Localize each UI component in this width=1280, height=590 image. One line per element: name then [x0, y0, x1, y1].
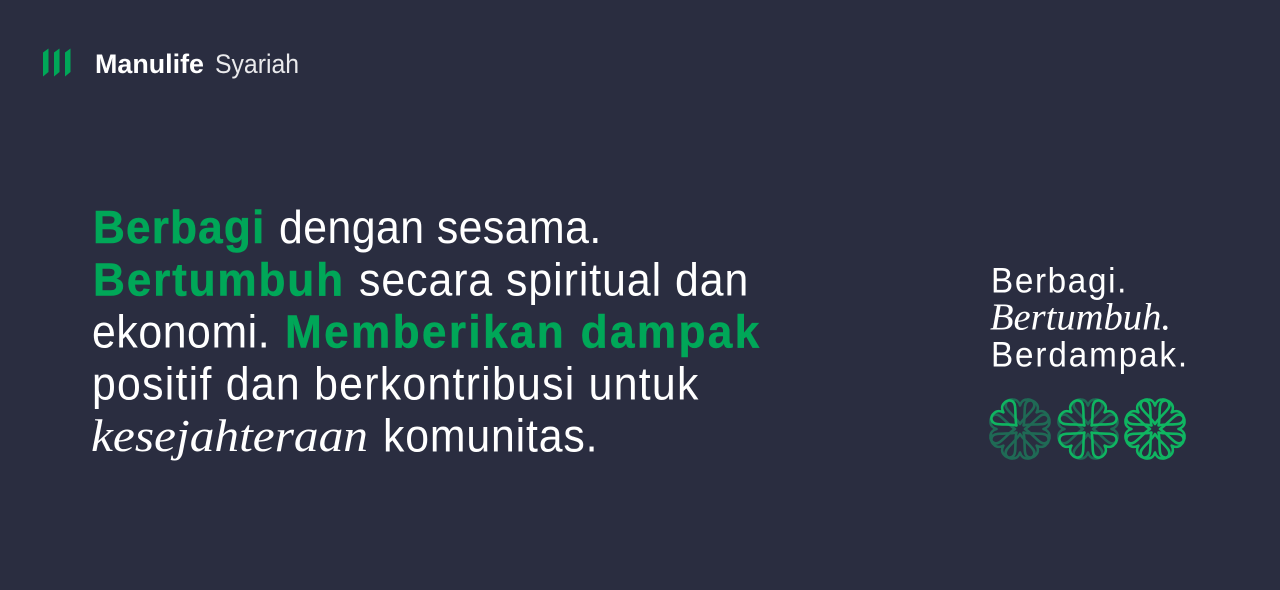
line 1: dengan sesama.: [279, 203, 601, 253]
line 2: [93, 254, 748, 306]
icons: three clover flowers: [989, 398, 1186, 460]
line 3: Memberikan dampak: [285, 306, 760, 358]
line 4: positif dan berkontribusi untuk: [92, 359, 699, 410]
line 2: Bertumbuh: [93, 254, 343, 306]
logo: Manulife Syariah: [43, 48, 299, 79]
line 1: Berbagi: [93, 201, 264, 253]
line 3: ekonomi.: [92, 307, 270, 358]
line 5: komunitas.: [383, 411, 597, 462]
logo suffix: Syariah: [215, 49, 299, 79]
icon: flower with one bright petal: [989, 398, 1051, 460]
tagline: Bertumbuh: Bertumbuh.: [990, 296, 1171, 338]
main statement: [91, 201, 760, 462]
icon: flower with eight bright petals: [1124, 398, 1186, 460]
tagline: Berdampak: Berdampak.: [991, 336, 1187, 375]
tagline: Berbagi: Berbagi.: [991, 262, 1126, 301]
line 5: kesejahteraan: [91, 410, 368, 461]
line 2: secara spiritual dan: [359, 255, 748, 306]
line 5: [91, 410, 597, 462]
line 1: [93, 201, 601, 253]
icon: Manulife three stripes: [43, 48, 70, 76]
tagline: [990, 262, 1187, 375]
icon: flower with four bright petals: [1057, 398, 1119, 460]
logo wordmark: Manulife: [95, 49, 204, 79]
